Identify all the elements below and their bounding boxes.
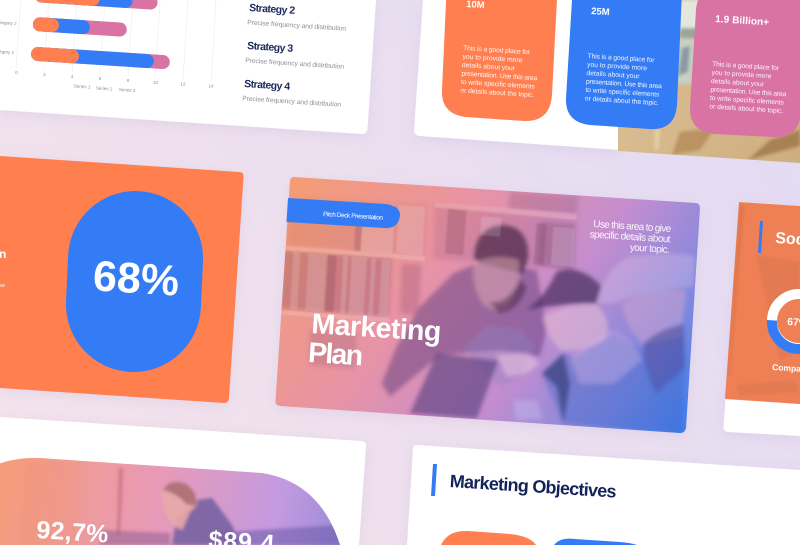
stat card: 1.9 Billion+: or details about the topic. [709,103,784,115]
blue card top [554,539,637,545]
slide photo shape [0,458,340,545]
panel: Marketing Objectives slide [407,445,800,545]
strategy 2: Precise frequency and distribution [247,19,346,33]
bar chart: 8 [127,78,130,83]
badge: Pitch Deck Presentation: Pitch Deck Presentation [323,211,384,222]
bar chart: 2 [43,72,46,77]
bar chart: 4 [71,74,74,79]
panel: 68% slide [0,156,244,403]
title: Marketing Plan [307,308,442,377]
hero description: specific details about [589,229,671,245]
stat card: 25M: to write specific elements [585,87,660,99]
title: Marketing Plan: Plan [307,337,364,372]
stat card: 10M: you to provide more [462,53,523,64]
strategy 3: Strategy 3 [247,40,294,55]
slide photo: desk and shelves [618,0,800,163]
donut chart [770,294,800,351]
blue pill with 68% [63,188,206,375]
panel: figures slide [0,417,370,545]
strategy 2: Strategy 2 [249,2,296,17]
hero photo: shelves and three men [280,192,695,433]
bar chart: Series 3 [119,87,136,93]
stat card: 1.9 Billion+: This is a good place for [712,61,780,72]
stat card: 1.9 Billion+ [690,0,800,137]
bar chart: 6 [99,76,102,81]
accent bar [758,221,763,253]
slide photo [720,200,800,405]
stat card: 10M: or details about the topic. [460,87,535,99]
panel: strategy chart slide [0,0,376,134]
stat card: 25M: 25M [591,6,610,18]
stat card: 25M: presentation. Use this area [586,78,662,90]
stat card: 10M: to write specific elements [461,79,536,91]
stat card: 25M: you to provide more [587,61,647,72]
stat card: 1.9 Billion+: you to provide more [711,69,772,80]
strategy 4 [242,78,343,109]
hero description: your topic. [630,242,670,256]
stat card: 25M: This is a good place for [587,53,655,64]
title: Marketing Plan: Marketing [311,308,442,348]
stat card: 10M: This is a good place for [463,45,531,56]
stat card: 10M: details about your [462,62,516,72]
bar chart: 10 [153,80,158,85]
stat card: 25M: or details about the topic. [585,95,659,107]
panel: Marketing Plan hero slide [275,177,700,433]
strategy 4: Precise frequency and distribution [242,95,341,109]
panel: statistics slide [414,0,800,170]
stat card: 1.9 Billion+: presentation. Use this area [710,86,787,98]
stat card: 10M [442,0,558,121]
bar chart [0,0,216,93]
bar chart: 12 [180,82,186,86]
strategy 4: Strategy 4 [244,78,291,93]
stat card: 1.9 Billion+: details about your [711,78,765,88]
stat card: 1.9 Billion+: 1.9 Billion+ [715,14,770,28]
bar chart: Series 1 [74,83,91,90]
hero description [589,219,672,256]
bar chart: 14 [208,84,214,88]
panel: social media slide [720,200,800,436]
blue pill with 68%: 68% [92,252,181,306]
strategy 3 [245,40,346,71]
stat card: 1.9 Billion+: to write specific elements [710,95,785,107]
bar chart: Series 2 [96,85,113,92]
badge: Pitch Deck Presentation [286,198,400,228]
strategy 2 [247,2,348,33]
heading: Marketing Objectives: Marketing Objectives [449,471,617,502]
stat card: 25M [566,0,682,129]
stat card: 25M: details about your [586,70,640,80]
stat card: 10M: presentation. Use this area [461,70,538,82]
bar chart: 0 [15,70,18,75]
orange card top [441,531,536,545]
strategy 3: Precise frequency and distribution [245,57,344,71]
accent bar [431,464,437,496]
hero description: Use this area to give [593,219,672,235]
